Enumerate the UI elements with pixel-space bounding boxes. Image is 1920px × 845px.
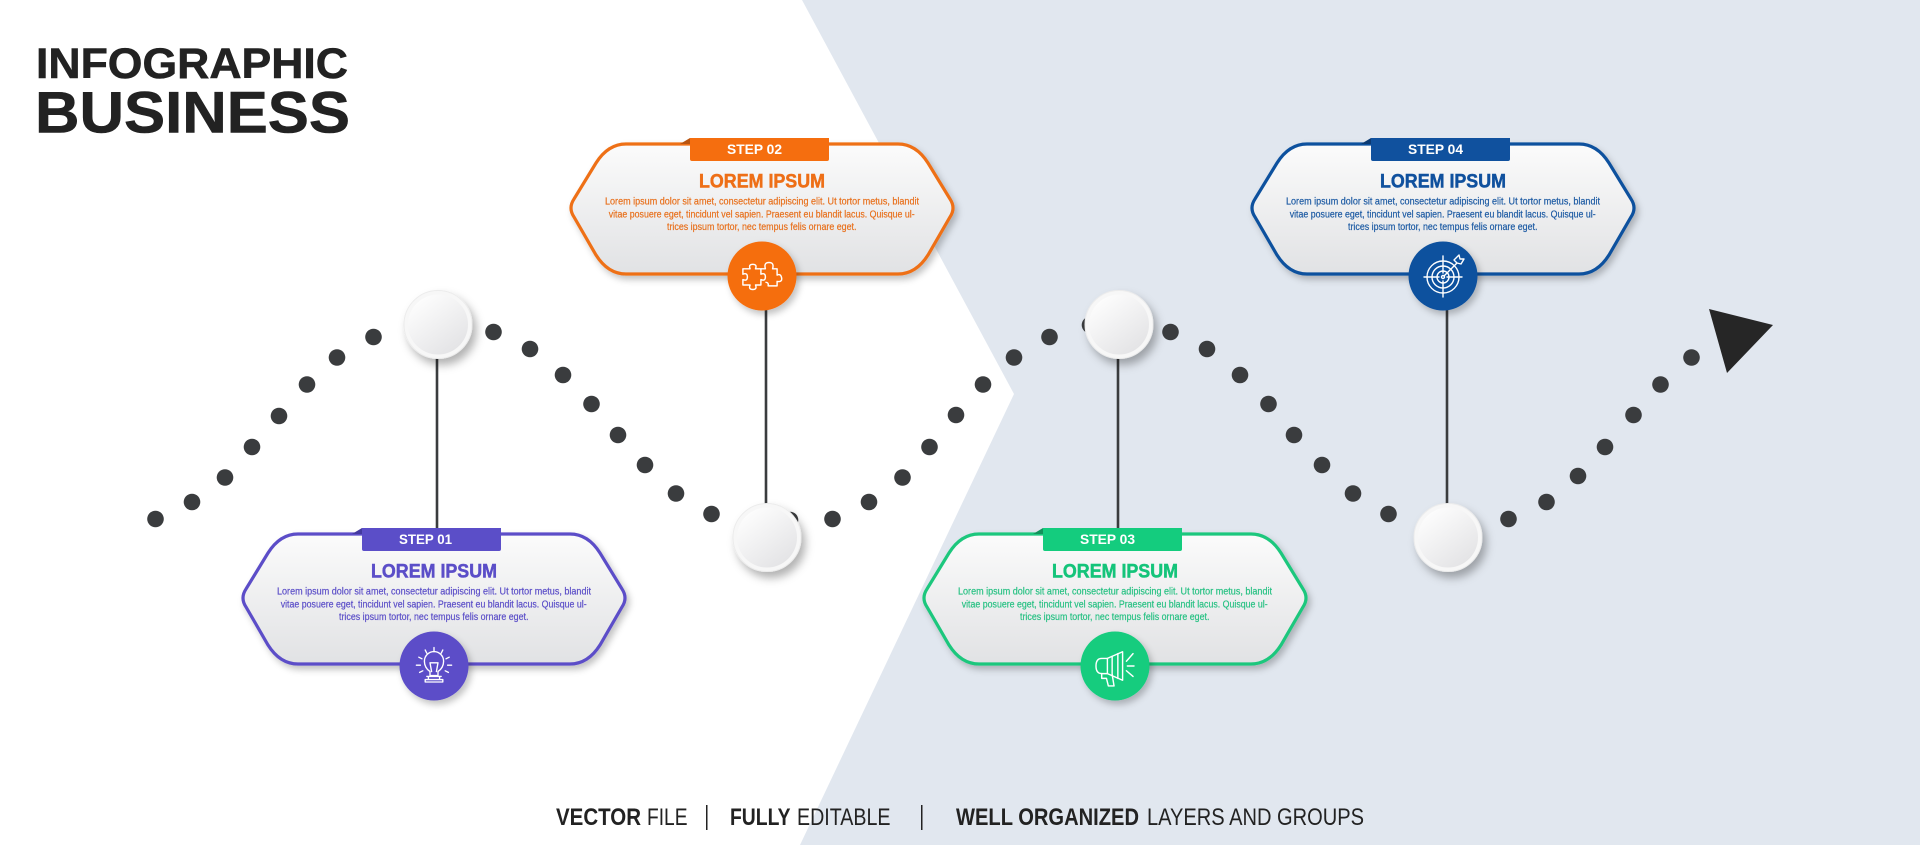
- icon: target: [1408, 242, 1478, 310]
- body text: [958, 586, 1272, 623]
- body text: Lorem ipsum dolor sit amet, consectetur adipiscing elit. Ut tortor metus, blandit: [958, 586, 1272, 598]
- background: white arrow shape: [0, 0, 1014, 845]
- arrow head: [1709, 309, 1773, 373]
- node circle 1: [404, 290, 472, 358]
- icon: megaphone: [1080, 632, 1150, 700]
- body text: trices ipsum tortor, nec tempus felis ornare eget.: [339, 611, 528, 623]
- footer caption: LAYERS AND GROUPS: [1147, 804, 1364, 831]
- step tab: STEP 02: [727, 141, 782, 157]
- footer caption: VECTOR: [556, 804, 641, 831]
- body text: trices ipsum tortor, nec tempus felis ornare eget.: [667, 221, 856, 233]
- title: INFOGRAPHIC: [36, 40, 348, 88]
- icon: light bulb: [400, 632, 468, 700]
- panel outline: [571, 144, 953, 274]
- panel: step 02: [571, 138, 953, 310]
- body text: vitae posuere eget, tincidunt vel sapien. Praesent eu blandit lacus. Quisque ul-: [1290, 208, 1596, 220]
- footer caption: EDITABLE: [797, 804, 890, 831]
- body text: trices ipsum tortor, nec tempus felis ornare eget.: [1020, 611, 1210, 623]
- body text: Lorem ipsum dolor sit amet, consectetur adipiscing elit. Ut tortor metus, blandit: [605, 196, 919, 208]
- body text: vitae posuere eget, tincidunt vel sapien. Praesent eu blandit lacus. Quisque ul-: [281, 598, 587, 610]
- connector line: step 02: [765, 305, 767, 510]
- panel outline: [1252, 144, 1634, 274]
- footer caption: [556, 804, 1364, 831]
- heading: LOREM IPSUM: [1052, 560, 1178, 582]
- step tab: STEP 03: [1080, 531, 1135, 547]
- heading: LOREM IPSUM: [1380, 170, 1506, 192]
- title: [35, 40, 350, 146]
- body text: trices ipsum tortor, nec tempus felis ornare eget.: [1348, 221, 1538, 233]
- footer caption: WELL ORGANIZED: [956, 804, 1139, 831]
- node circle 4: [1414, 504, 1482, 572]
- node circle 3: [1085, 290, 1153, 358]
- step tab: STEP 01: [399, 531, 452, 547]
- title: BUSINESS: [35, 80, 350, 146]
- footer caption: FULLY: [730, 804, 790, 831]
- connector line: step 04: [1446, 305, 1448, 510]
- node circle 2: [733, 504, 801, 572]
- body text: vitae posuere eget, tincidunt vel sapien. Praesent eu blandit lacus. Quisque ul-: [609, 208, 915, 220]
- step tab: [1361, 138, 1510, 161]
- step tab: [352, 528, 501, 551]
- heading: LOREM IPSUM: [371, 560, 497, 582]
- connector line: step 01: [436, 350, 438, 530]
- panel outline: [924, 534, 1306, 664]
- step tab: [680, 138, 829, 161]
- body text: [605, 196, 919, 233]
- body text: Lorem ipsum dolor sit amet, consectetur adipiscing elit. Ut tortor metus, blandit: [1286, 196, 1600, 208]
- body text: [277, 586, 591, 623]
- body text: vitae posuere eget, tincidunt vel sapien. Praesent eu blandit lacus. Quisque ul-: [962, 598, 1268, 610]
- panel: step 04: [1252, 138, 1634, 310]
- body text: Lorem ipsum dolor sit amet, consectetur adipiscing elit. Ut tortor metus, blandit: [277, 586, 591, 598]
- step tab: [1033, 528, 1182, 551]
- dotted path: [147, 317, 1700, 528]
- panel: step 01: [243, 528, 625, 700]
- panel outline: [243, 534, 625, 664]
- footer caption: FILE: [647, 804, 688, 831]
- connector line: step 03: [1117, 350, 1119, 530]
- step tab: STEP 04: [1408, 141, 1463, 157]
- heading: LOREM IPSUM: [699, 170, 825, 192]
- body text: [1286, 196, 1600, 233]
- panel: step 03: [924, 528, 1306, 700]
- icon: puzzle: [728, 242, 796, 310]
